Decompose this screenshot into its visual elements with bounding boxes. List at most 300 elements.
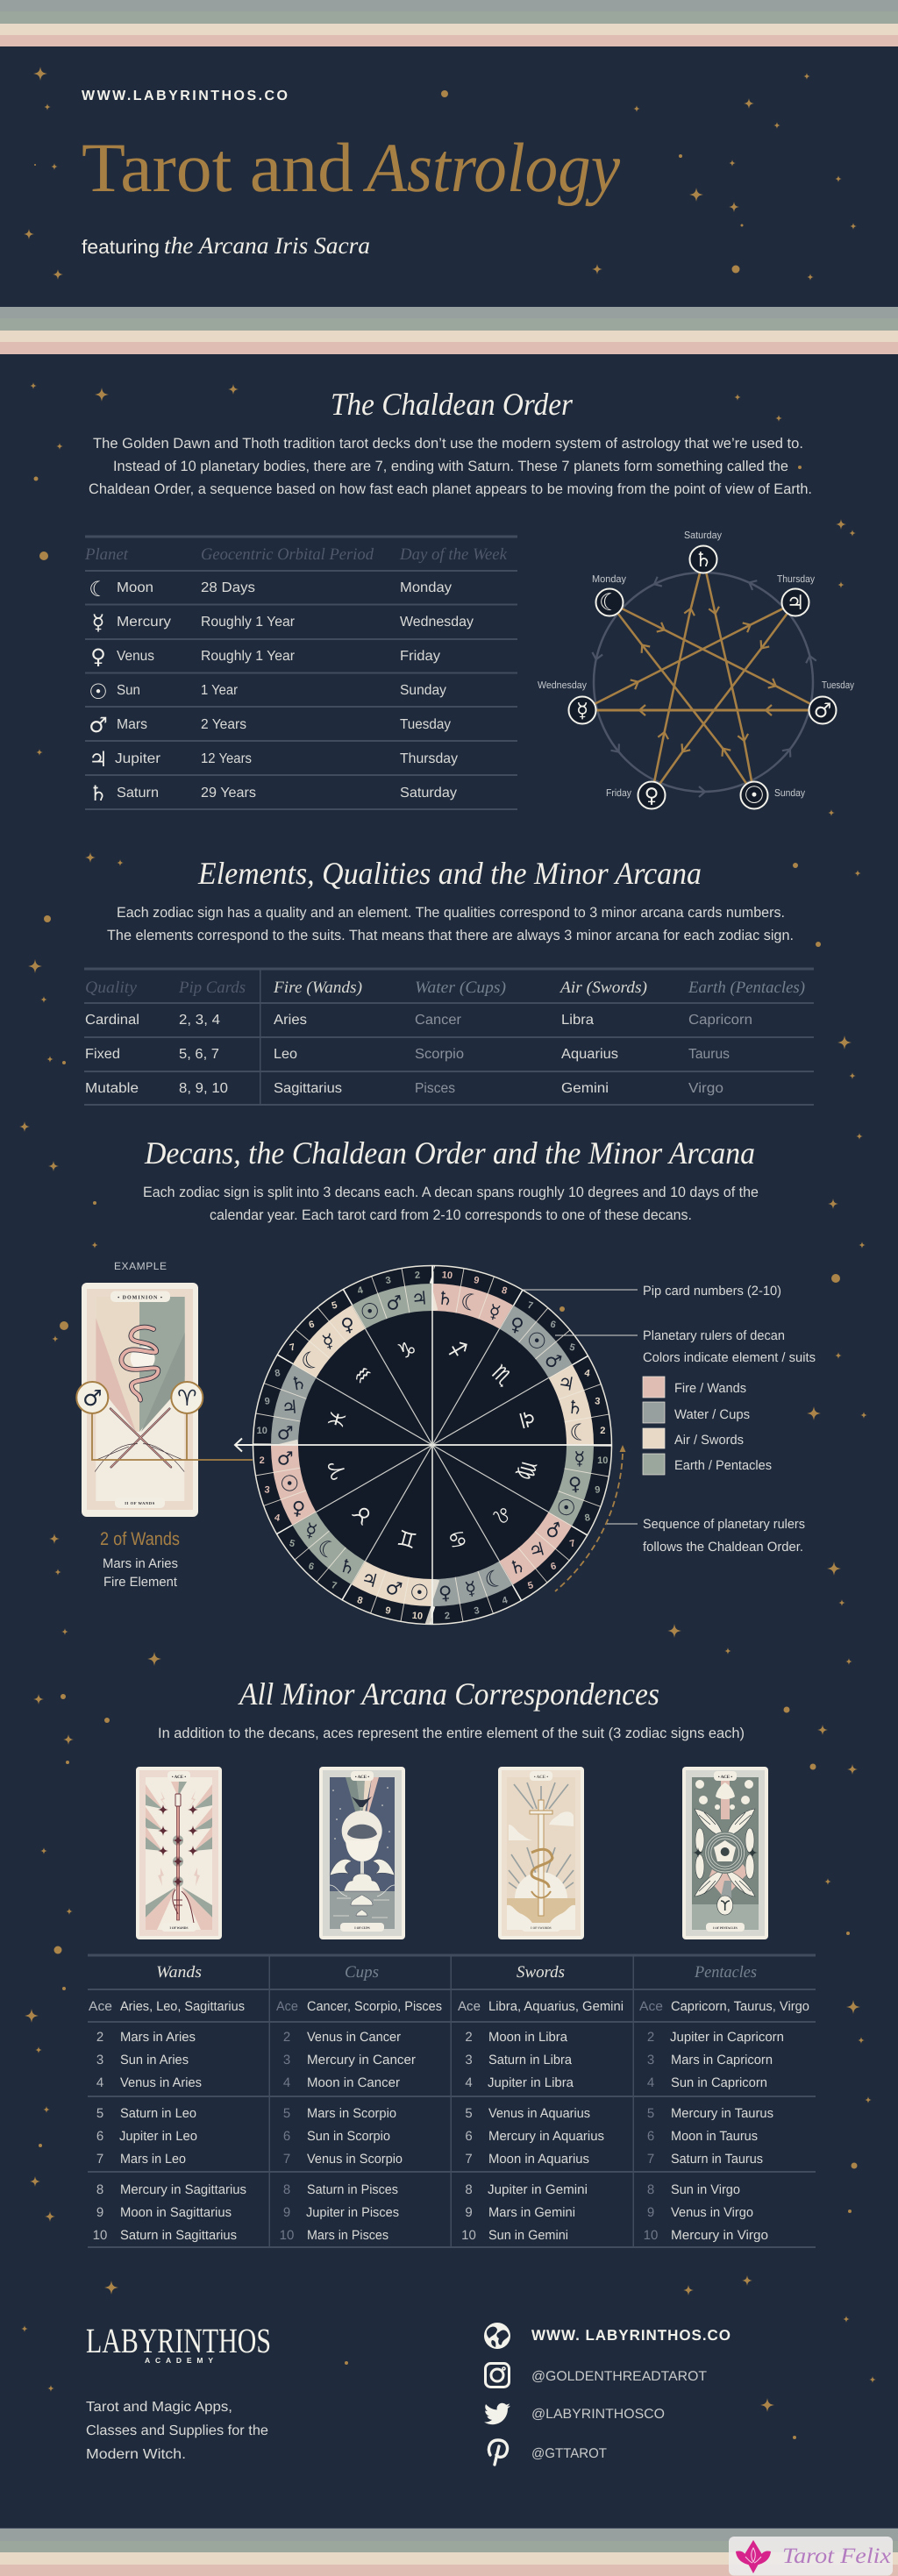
row: sun	[89, 680, 446, 704]
column: swords	[461, 2030, 604, 2243]
column: wands: Saturn in Sagittarius	[120, 2228, 237, 2243]
zodiac signs: ♈	[324, 1458, 352, 1483]
planetary rulers of decans: ♄	[289, 1371, 309, 1395]
tagline: Modern Witch.	[86, 2447, 186, 2462]
column: pentacles: Sun in Virgo	[671, 2182, 740, 2197]
column: cups: 9	[283, 2205, 290, 2220]
top stripes	[0, 0, 898, 46]
pip numbers: 4	[274, 1512, 282, 1524]
planetary rulers of decans: ☾	[298, 1346, 324, 1377]
pip numbers: 8	[356, 1595, 364, 1606]
column: swords: Venus in Aquarius	[488, 2106, 590, 2121]
intro paragraph	[107, 905, 794, 943]
planetary rulers of decans: ☉	[279, 1470, 301, 1498]
column: pentacles: 3	[647, 2053, 654, 2067]
ribbons	[706, 1771, 745, 1932]
row: fixed: Fixed	[85, 1047, 120, 1062]
day labels: Thursday	[777, 574, 815, 585]
planetary rulers of decans: ♃	[410, 1287, 429, 1310]
planetary rulers of decans: ♀	[508, 1313, 526, 1337]
pip numbers: 5	[288, 1538, 296, 1549]
row: cardinal: Aries	[274, 1013, 307, 1028]
planetary rulers of decans	[277, 1287, 590, 1606]
suit headers	[156, 1963, 757, 1982]
callout: sequence of rulers: follows the Chaldean Order.	[643, 1540, 803, 1555]
row: venus: Venus	[117, 649, 154, 664]
ace row: Aries, Leo, Sagittarius	[120, 1999, 245, 2014]
row: moon	[89, 577, 452, 601]
intro paragraph: Each zodiac sign has a quality and an element. The qualities correspond to 3 minor arcana cards numbers.	[117, 905, 785, 921]
planetary rulers of decans: ☾	[314, 1535, 341, 1566]
planetary rulers of decans: ♃	[526, 1538, 548, 1562]
logo: Labyrinthos Academy: ACADEMY	[145, 2356, 213, 2365]
planetary rulers of decans: ♀	[289, 1497, 307, 1519]
callout: pip card numbers: Pip card numbers (2-10)	[643, 1284, 781, 1299]
planetary rulers of decans: ♄	[436, 1287, 454, 1310]
ace row	[89, 1999, 809, 2014]
heading: the Chaldean order: The Chaldean Order	[331, 387, 574, 422]
day labels: Tuesday	[822, 680, 854, 691]
column: pentacles: 10	[644, 2228, 658, 2243]
zodiac signs: ♐	[445, 1336, 470, 1364]
legend: element colours: Air / Swords	[674, 1433, 744, 1448]
row: mars: Mars	[117, 717, 147, 732]
row: saturn	[89, 781, 457, 806]
footer	[86, 2321, 731, 2465]
zodiac signs: ♌	[487, 1499, 517, 1530]
column: cups: 8	[283, 2182, 290, 2197]
website url: WWW.LABYRINTHOS.CO	[82, 89, 288, 103]
column: cups: Saturn in Pisces	[307, 2182, 398, 2197]
zodiac signs: ♑	[395, 1336, 419, 1364]
card: ace of pentacles	[682, 1767, 768, 1939]
row: venus: Roughly 1 Year	[201, 649, 296, 664]
column: wands: 5	[96, 2106, 103, 2121]
pip numbers: 6	[550, 1561, 558, 1572]
day labels: Friday	[606, 788, 631, 799]
pip numbers: 2	[260, 1455, 265, 1466]
column: wands: 3	[96, 2053, 103, 2067]
intro sentence: In addition to the decans, aces represent the entire element of the suit (3 zodiac signs each)	[158, 1726, 745, 1741]
column: pentacles: 2	[647, 2030, 654, 2045]
zodiac signs: ♒	[347, 1360, 378, 1391]
row: mutable: Virgo	[688, 1081, 723, 1096]
row: mercury: Wednesday	[400, 615, 474, 630]
watermark wordmark: Tarot Felix	[782, 2544, 891, 2568]
column: swords: 10	[461, 2228, 476, 2243]
column: pentacles: Mercury in Virgo	[671, 2228, 768, 2243]
planetary rulers of decans: ☉	[524, 1326, 550, 1356]
section: all minor arcana correspondences	[88, 1676, 816, 2248]
row: mars	[89, 713, 451, 737]
column: swords: 5	[465, 2106, 473, 2121]
legend: element colours: Fire / Wands	[674, 1381, 746, 1396]
zodiac signs: ♏	[487, 1360, 517, 1391]
column: pentacles: Moon in Taurus	[671, 2129, 758, 2144]
example caption: 2 of Wands	[100, 1529, 180, 1549]
column: cups: Sun in Scorpio	[307, 2129, 390, 2144]
header lower stripes	[0, 307, 898, 354]
suit headers: Pentacles	[694, 1963, 757, 1982]
table header: Geocentric Orbital Period	[201, 545, 374, 564]
column: wands: 10	[93, 2228, 107, 2243]
intro paragraph: The Golden Dawn and Thoth tradition tarot decks don’t use the modern system of astrology that we’re used to.	[93, 436, 803, 452]
planetary rulers of decans: ♂	[277, 1422, 294, 1443]
column: cups: Mercury in Cancer	[307, 2053, 416, 2067]
column: wands: Saturn in Leo	[120, 2106, 196, 2121]
card title ribbons: II OF WANDS	[125, 1501, 155, 1505]
zodiac decan wheel	[231, 1243, 634, 1647]
row: mutable: Sagittarius	[274, 1081, 342, 1096]
intro paragraph: Each zodiac sign is split into 3 decans each. A decan spans roughly 10 degrees and 10 days of the	[143, 1185, 759, 1200]
row: mars: 2 Years	[201, 717, 246, 732]
column: wands: Venus in Aries	[120, 2075, 202, 2090]
column: wands: Mars in Aries	[120, 2030, 196, 2045]
row: jupiter: Jupiter	[115, 751, 161, 766]
text: website: WWW. LABYRINTHOS.CO	[531, 2327, 731, 2344]
pip numbers: 3	[264, 1484, 270, 1496]
mars circle	[76, 1382, 108, 1413]
pip numbers: 5	[568, 1342, 576, 1354]
planet node glyphs	[576, 549, 831, 809]
column: swords: 9	[465, 2205, 473, 2220]
icon: instagram	[486, 2364, 509, 2387]
row: mercury	[92, 610, 474, 635]
ribbons: I OF SWORDS	[531, 1926, 552, 1930]
subtitle: featuring	[82, 236, 160, 258]
header text block	[82, 89, 620, 259]
planetary rulers of decans: ☾	[481, 1564, 509, 1595]
row: cardinal: Libra	[561, 1013, 594, 1028]
example label: EXAMPLE	[114, 1260, 167, 1272]
planetary rulers of decans: ♂	[384, 1292, 404, 1315]
circle direction chevrons	[591, 577, 816, 797]
callout: planetary rulers: Planetary rulers of decan	[643, 1328, 785, 1343]
planetary rulers of decans: ♂	[543, 1348, 564, 1373]
planetary rulers of decans: ♃	[359, 1568, 381, 1592]
legend: element colours: Water / Cups	[674, 1407, 750, 1422]
row: jupiter: 12 Years	[201, 751, 252, 766]
column: wands: 6	[96, 2129, 103, 2144]
column: cups: 4	[283, 2075, 290, 2090]
zodiac signs: ♉	[347, 1499, 378, 1530]
column: pentacles: Sun in Capricorn	[671, 2075, 767, 2090]
row: saturn: Saturday	[400, 786, 457, 801]
ace row: Ace	[458, 1999, 481, 2014]
intro paragraph: Chaldean Order, a sequence based on how fast each planet appears to be moving from the point of view of Earth.	[89, 481, 812, 497]
row: mutable: Mutable	[85, 1081, 139, 1096]
card title ribbons	[110, 1291, 170, 1508]
callout: planetary rulers: Colors indicate element / suits	[643, 1350, 816, 1365]
planets table	[84, 535, 517, 810]
watermark: Tarot Felix	[729, 2537, 893, 2576]
zodiac signs: ♋	[445, 1526, 470, 1554]
tagline	[86, 2400, 268, 2462]
row: moon: ☾	[89, 577, 108, 601]
row: sun: Sun	[117, 683, 140, 698]
section: the Chaldean order	[84, 387, 854, 810]
row: mercury: ☿	[92, 610, 104, 635]
day labels: Sunday	[774, 788, 805, 799]
pip numbers: 2	[600, 1426, 605, 1436]
row: jupiter: ♃	[89, 747, 108, 772]
card: ace of wands	[136, 1767, 222, 1939]
row: saturn: 29 Years	[201, 786, 256, 801]
pip numbers: 2	[415, 1270, 421, 1281]
ribbons	[161, 1771, 196, 1932]
example caption	[100, 1529, 180, 1590]
column: swords: 3	[465, 2053, 473, 2067]
chart: heptagram of the Chaldean order	[538, 530, 854, 809]
suit headers: Swords	[517, 1963, 565, 1982]
aries circle: ♈	[177, 1385, 197, 1411]
pip numbers: 4	[583, 1368, 591, 1379]
ace row: Libra, Aquarius, Gemini	[488, 1999, 624, 2014]
text: twitter handle: @LABYRINTHOSCO	[531, 2407, 665, 2422]
column: pentacles: 9	[647, 2205, 654, 2220]
row: mutable: Gemini	[561, 1081, 609, 1096]
row: moon: Monday	[400, 580, 452, 595]
column: wands	[93, 2030, 246, 2243]
planetary rulers of decans: ☉	[554, 1493, 578, 1522]
column: swords: Sun in Gemini	[488, 2228, 568, 2243]
pip numbers: 7	[330, 1580, 338, 1591]
planetary rulers of decans: ♀	[438, 1582, 453, 1604]
card: ace of swords	[498, 1767, 584, 1939]
pip numbers: 3	[385, 1275, 392, 1286]
subtitle: the Arcana Iris Sacra	[164, 232, 370, 259]
planetary rulers of decans: ☿	[487, 1300, 502, 1324]
pip numbers: 3	[474, 1605, 481, 1617]
planetary rulers of decans: ♄	[566, 1397, 584, 1419]
planetary rulers of decans: ♀	[339, 1313, 357, 1337]
row: mutable: Pisces	[415, 1081, 455, 1096]
column: wands: 2	[96, 2030, 103, 2045]
zodiac signs: ♓	[324, 1407, 352, 1432]
zodiac signs: ♎	[513, 1407, 541, 1432]
column: swords: Mercury in Aquarius	[488, 2129, 604, 2144]
row: mercury: Roughly 1 Year	[201, 615, 296, 630]
column: pentacles: 8	[647, 2182, 654, 2197]
column: cups	[280, 2030, 416, 2243]
logo: Labyrinthos Academy: LABYRINTHOS	[86, 2321, 271, 2360]
row: fixed: 5, 6, 7	[179, 1047, 219, 1062]
gold star lines with arrows	[582, 559, 823, 795]
column: cups: 5	[283, 2106, 290, 2121]
ace row: Ace	[276, 1999, 298, 2014]
row: moon: 28 Days	[201, 580, 255, 595]
pip numbers: 8	[584, 1512, 591, 1524]
row: mercury: Mercury	[117, 615, 171, 630]
section: decans	[76, 1135, 816, 1647]
planet node glyphs: ♂	[814, 700, 831, 722]
row: sun: 1 Year	[201, 683, 239, 698]
wheel base	[253, 1266, 612, 1624]
pip numbers: 5	[527, 1580, 535, 1591]
pip numbers: 9	[384, 1605, 391, 1617]
legend: element colours	[643, 1377, 772, 1475]
wheel callouts and legend	[522, 1284, 816, 1591]
column: wands: Mercury in Sagittarius	[120, 2182, 246, 2197]
column: cups: 2	[283, 2030, 290, 2045]
zodiac signs: ♍	[513, 1458, 541, 1483]
row: fixed: Scorpio	[415, 1047, 464, 1062]
column: cups: Mars in Scorpio	[307, 2106, 396, 2121]
column: swords: Saturn in Libra	[488, 2053, 573, 2067]
pip numbers: 10	[441, 1270, 453, 1281]
ace row: Ace	[639, 1999, 663, 2014]
planetary rulers of decans: ♂	[543, 1519, 564, 1543]
intro paragraph: The elements correspond to the suits. That means that there are always 3 minor arcana for each zodiac sign.	[107, 928, 794, 943]
pip numbers: 2	[445, 1611, 451, 1621]
heading: elements, qualities: Elements, Qualities and the Minor Arcana	[197, 856, 702, 891]
ribbons	[522, 1771, 560, 1932]
ace row: Cancer, Scorpio, Pisces	[307, 1999, 442, 2014]
pip numbers: 10	[257, 1426, 267, 1436]
ace row: Capricorn, Taurus, Virgo	[671, 1999, 809, 2014]
column: pentacles: Jupiter in Capricorn	[670, 2030, 784, 2045]
column: pentacles: 6	[647, 2129, 654, 2144]
intro paragraph: calendar year. Each tarot card from 2-10 corresponds to one of these decans.	[210, 1207, 692, 1223]
table header	[85, 978, 805, 997]
outer order circle	[594, 573, 813, 792]
column: swords: 6	[465, 2129, 473, 2144]
row: venus: ♀	[90, 644, 106, 669]
ribbons: I OF CUPS	[354, 1926, 370, 1930]
row: moon: Moon	[117, 580, 153, 595]
example caption: Fire Element	[103, 1575, 178, 1590]
column: swords: Mars in Gemini	[488, 2205, 575, 2220]
row: cardinal: 2, 3, 4	[179, 1013, 220, 1028]
column: swords: 2	[465, 2030, 473, 2045]
column: cups: Jupiter in Pisces	[306, 2205, 399, 2220]
pip numbers: 4	[356, 1284, 365, 1297]
row: sun: ☉	[89, 680, 108, 704]
ribbons: • ACE •	[718, 1775, 732, 1780]
icon: twitter bird	[484, 2403, 510, 2424]
row: fixed: Aquarius	[561, 1047, 618, 1062]
table header: Day of the Week	[399, 545, 508, 564]
pip numbers: 6	[549, 1319, 557, 1331]
table header: Quality	[85, 978, 138, 997]
table header: Pip Cards	[178, 978, 246, 997]
intro paragraph	[89, 436, 812, 497]
main title: Tarot and	[82, 130, 353, 207]
column: pentacles: Mercury in Taurus	[671, 2106, 773, 2121]
column: swords: 8	[465, 2182, 473, 2197]
planetary rulers of decans: ♀	[567, 1473, 583, 1495]
qualities table	[84, 968, 814, 1106]
column: wands: Moon in Sagittarius	[120, 2205, 232, 2220]
suit headers: Cups	[345, 1963, 379, 1982]
callout: sequence of rulers	[607, 1517, 805, 1555]
ribbons: • ACE •	[534, 1775, 548, 1780]
ribbons: I OF WANDS	[170, 1926, 188, 1930]
planetary rulers of decans: ☉	[409, 1579, 431, 1606]
pip numbers: 4	[501, 1595, 510, 1606]
planetary rulers of decans: ☾	[569, 1420, 590, 1446]
arrow: left pointing from wheel	[235, 1438, 253, 1452]
column: cups: Mars in Pisces	[307, 2228, 388, 2243]
icon: pinterest	[488, 2440, 508, 2465]
aries circle	[171, 1382, 203, 1413]
planetary rulers of decans: ♃	[556, 1371, 576, 1395]
row: jupiter	[89, 747, 458, 772]
planetary rulers of decans: ♄	[337, 1555, 358, 1579]
day labels: Wednesday	[538, 680, 587, 691]
correspondences table	[88, 1953, 816, 2248]
planetary rulers of decans: ☾	[458, 1288, 483, 1318]
planetary rulers of decans: ☿	[320, 1330, 336, 1353]
column: pentacles: 5	[647, 2106, 654, 2121]
pip numbers: 3	[595, 1396, 601, 1407]
row: fixed: Taurus	[688, 1047, 730, 1062]
text: pinterest handle: @GTTAROT	[531, 2446, 608, 2461]
row: saturn: Saturn	[117, 786, 159, 801]
planetary rulers of decans: ☿	[463, 1577, 478, 1600]
planetary rulers of decans: ♃	[281, 1397, 299, 1419]
pip numbers: 8	[274, 1368, 282, 1379]
icon: globe	[484, 2323, 510, 2349]
example card: 2 of wands	[76, 1283, 253, 1517]
column: swords: 4	[465, 2075, 473, 2090]
card title ribbons: • DOMINION •	[118, 1296, 163, 1301]
column: swords: Jupiter in Libra	[488, 2075, 574, 2090]
bottom stripes	[0, 2528, 898, 2576]
day labels	[538, 530, 854, 799]
dashed sequence arrow	[555, 1445, 626, 1591]
row: cardinal: Cancer	[415, 1013, 462, 1028]
column: swords: Moon in Aquarius	[488, 2152, 589, 2167]
column: cups: 7	[283, 2152, 290, 2167]
zodiac signs	[324, 1336, 541, 1554]
table header: Fire (Wands)	[273, 978, 362, 997]
row: jupiter: Thursday	[400, 751, 458, 766]
planet node glyphs: ☾	[599, 589, 620, 616]
table header: Planet	[84, 545, 129, 564]
planetary rulers of decans: ♂	[384, 1576, 404, 1600]
planet node glyphs: ☿	[576, 700, 588, 722]
ribbons: • ACE •	[172, 1775, 186, 1780]
planetary rulers of decans: ☉	[357, 1297, 383, 1327]
column: wands: 7	[96, 2152, 103, 2167]
day labels: Saturday	[684, 530, 722, 541]
column: pentacles: 4	[647, 2075, 654, 2090]
column: cups: Venus in Cancer	[307, 2030, 401, 2045]
pip numbers: 10	[597, 1455, 608, 1466]
row: saturn: ♄	[89, 781, 108, 806]
column: pentacles: Mars in Capricorn	[671, 2053, 773, 2067]
pip numbers: 9	[264, 1396, 270, 1407]
ace row: Ace	[89, 1999, 112, 2014]
planet node glyphs: ♃	[787, 592, 804, 615]
row: mutable	[85, 1081, 723, 1096]
intro paragraph	[143, 1185, 759, 1223]
column: wands: Sun in Aries	[120, 2053, 189, 2067]
row: fixed	[85, 1047, 730, 1062]
ribbons	[340, 1771, 384, 1932]
callout: sequence of rulers: Sequence of planetary rulers	[643, 1517, 805, 1532]
planet nodes	[568, 545, 837, 808]
section: elements and qualities	[84, 856, 814, 1106]
row: sun: Sunday	[400, 683, 446, 698]
main title: Astrology	[362, 130, 620, 207]
column: swords: 7	[465, 2152, 473, 2167]
intro paragraph: Instead of 10 planetary bodies, there are 7, ending with Saturn. These 7 planets form something called the	[113, 459, 788, 474]
row: mars: Tuesday	[400, 717, 451, 732]
pip numbers: 6	[308, 1319, 316, 1331]
pip numbers	[257, 1270, 608, 1622]
